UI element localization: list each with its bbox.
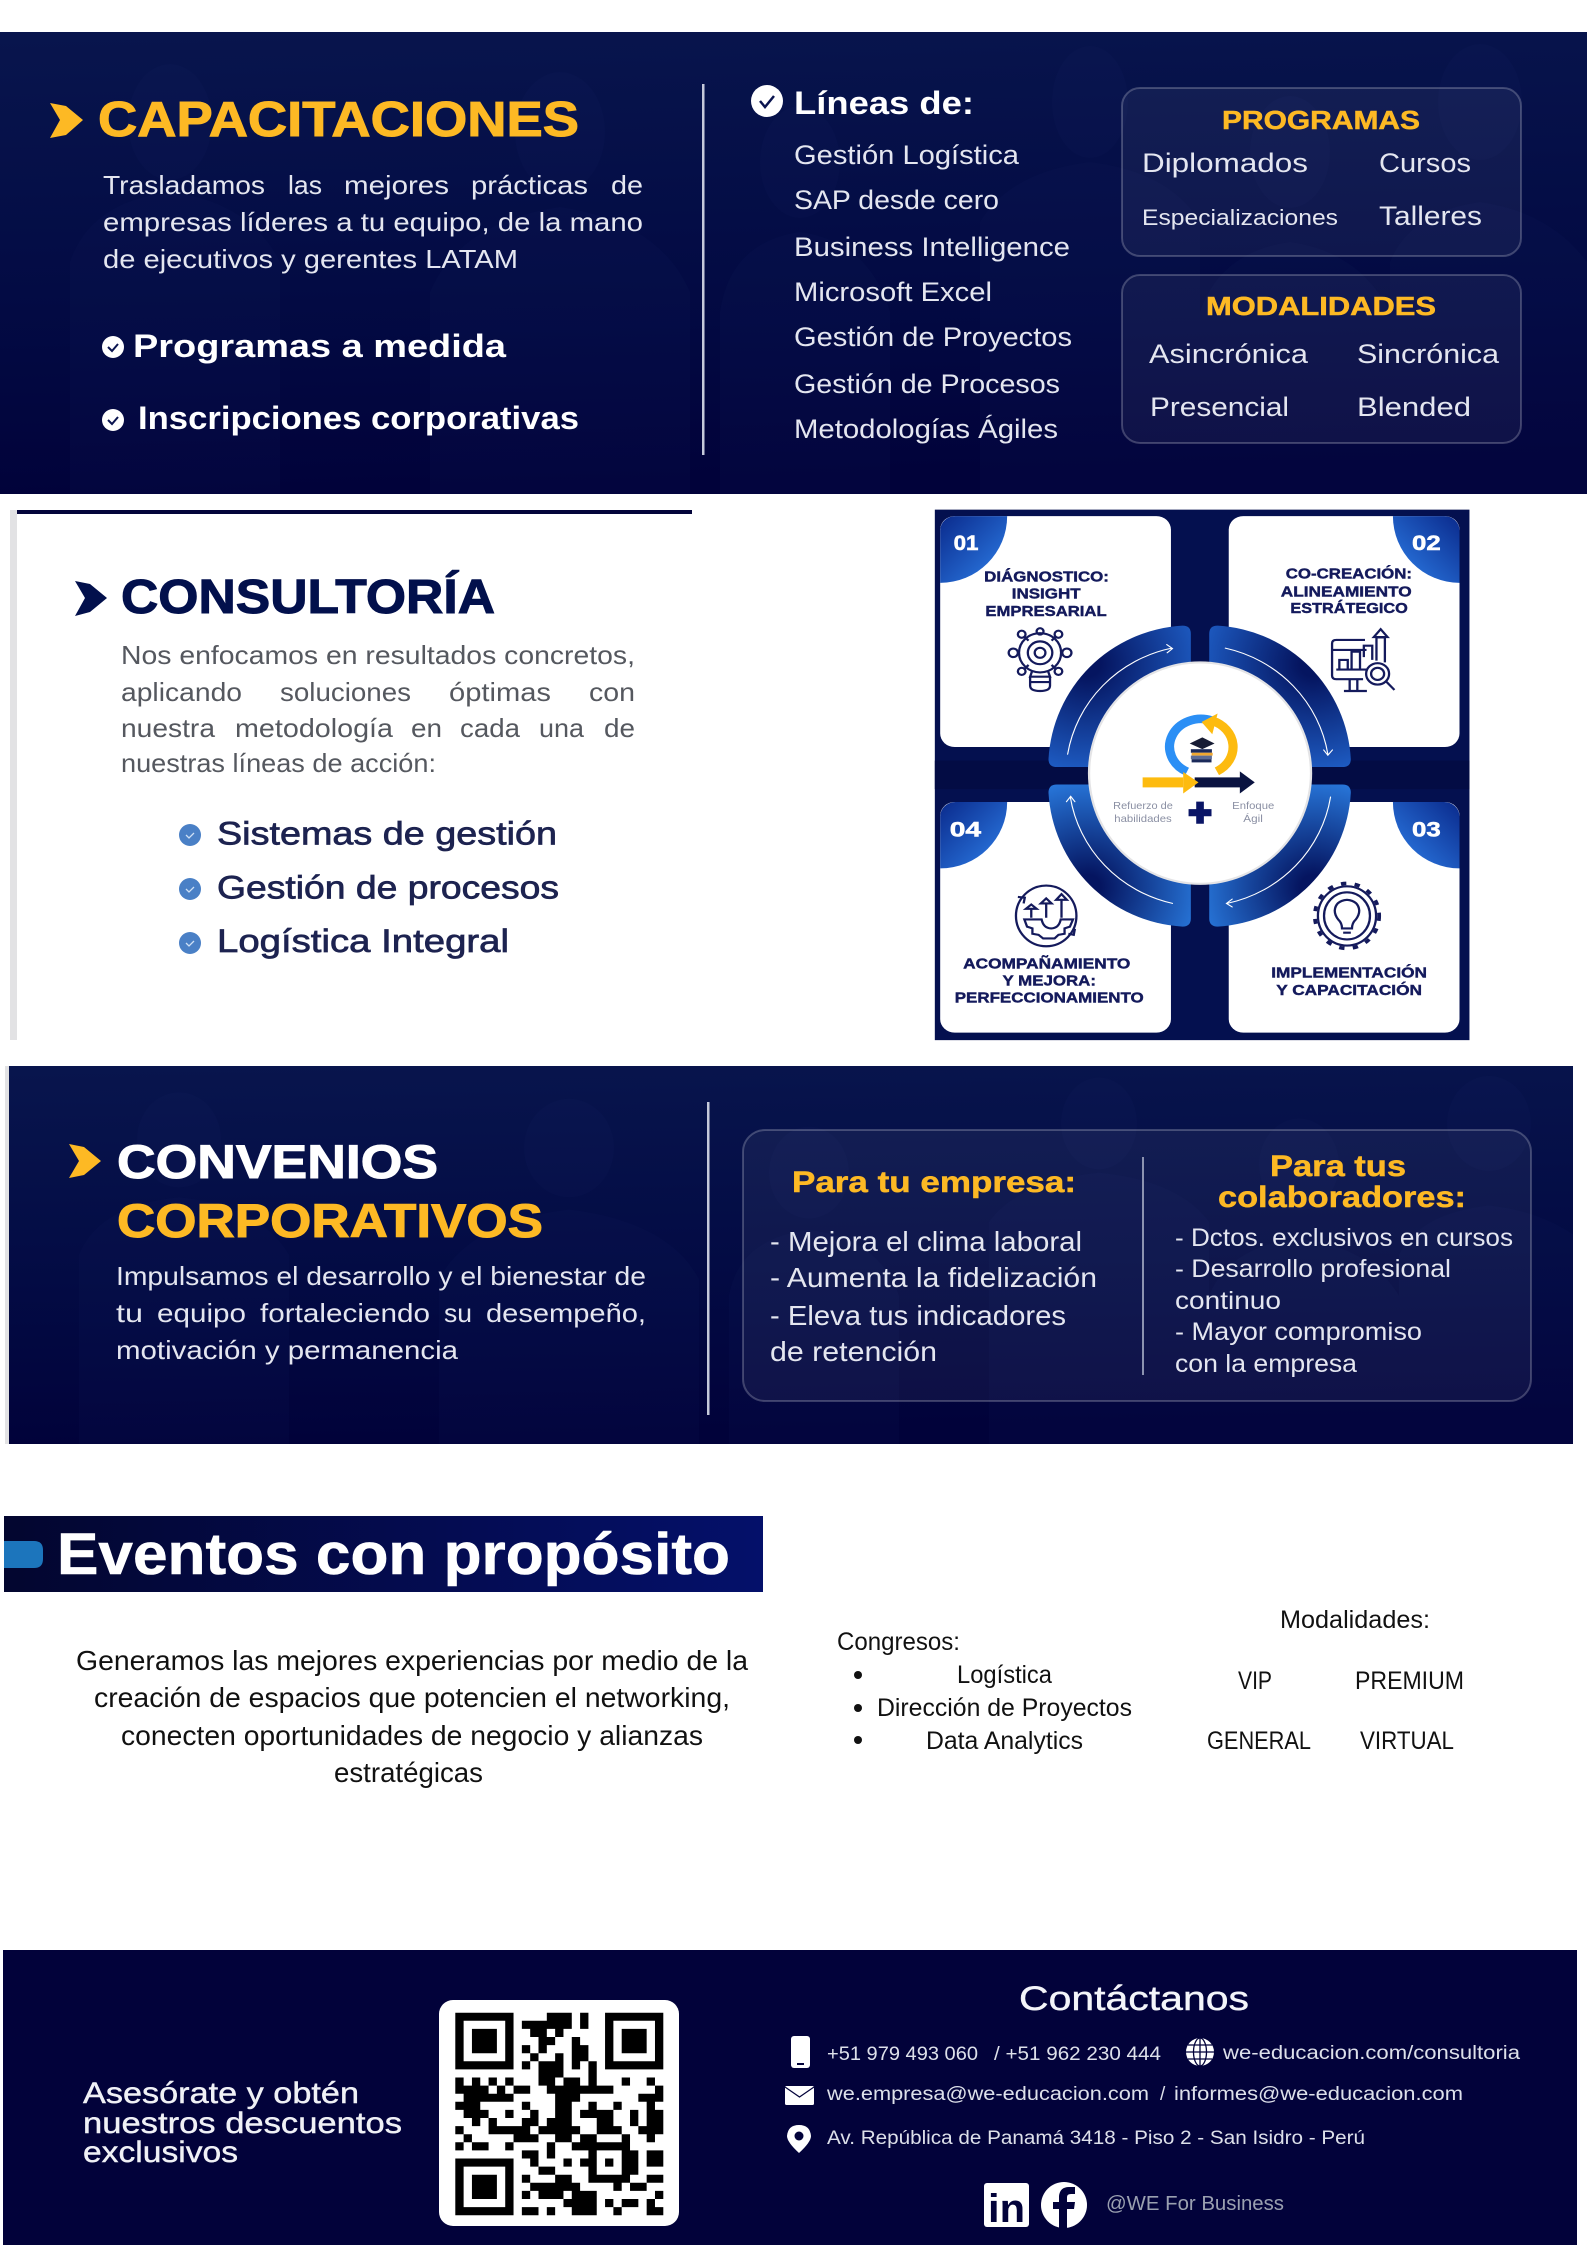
- heading: convenios corporativos: CORPORATIVOS: [117, 1194, 543, 1247]
- contact: emails: [785, 2084, 1463, 2105]
- column: para tus colaboradores: continuo: [1175, 1287, 1281, 1315]
- card 04: ACOMPAÑAMIENTO: [963, 955, 1130, 972]
- list: modalidades de eventos: GENERAL: [1207, 1727, 1311, 1755]
- list: modalidades de eventos: [1207, 1606, 1464, 1755]
- panel: consultoria: [10, 510, 692, 1040]
- list: lineas de: Gestión de Procesos: [794, 369, 1060, 399]
- icon: gear with lightbulb: [1315, 883, 1379, 948]
- contact: phones: +51 979 493 060: [827, 2044, 978, 2065]
- column: para tus colaboradores: Para tus: [1270, 1150, 1406, 1183]
- card 04: Y MEJORA:: [1003, 973, 1096, 989]
- text block: description: [121, 640, 635, 778]
- heading: capacitaciones: CAPACITACIONES: [98, 93, 579, 147]
- icon: yellow chevron: [50, 103, 83, 138]
- text block: description: cada: [460, 713, 521, 743]
- text block: description: de: [604, 713, 635, 743]
- text block: call to action: Asesórate y obtén: [83, 2077, 359, 2110]
- list: action lines: Logística Integral: [217, 923, 509, 959]
- text block: description: tu: [116, 1298, 143, 1328]
- text block: description: empresas líderes a tu equipo, de la mano: [103, 207, 643, 237]
- panel: modalidades: Presencial: [1150, 392, 1289, 422]
- text block: description: las: [288, 170, 322, 200]
- panel: programas: Cursos: [1379, 148, 1471, 178]
- heading band: eventos con proposito: Eventos con propósito: [57, 1522, 730, 1587]
- column: para tus colaboradores: [1175, 1150, 1513, 1378]
- panel: modalidades: Blended: [1357, 392, 1471, 422]
- text block: eventos description: estratégicas: [334, 1757, 483, 1788]
- text block: description: con: [589, 677, 635, 707]
- list: action lines: Gestión de procesos: [217, 870, 559, 906]
- panel: programas: Talleres: [1379, 201, 1482, 231]
- text block: description: metodología: [235, 713, 394, 743]
- text block: description: mejores: [344, 170, 449, 200]
- list: lineas de: Microsoft Excel: [794, 277, 992, 307]
- column: para tu empresa: Para tu empresa:: [792, 1166, 1076, 1199]
- text block: description: fortaleciendo: [260, 1298, 430, 1328]
- panel: capacitaciones: [0, 32, 1587, 494]
- text block: description: soluciones: [280, 677, 411, 707]
- column: para tus colaboradores: - Mayor compromiso: [1175, 1318, 1422, 1346]
- list: lineas de: Metodologías Ágiles: [794, 414, 1058, 444]
- heading: contactanos: Contáctanos: [1019, 1980, 1249, 2018]
- text block: description: Nos enfocamos en resultados concretos,: [121, 640, 635, 670]
- list: modalidades de eventos: PREMIUM: [1355, 1667, 1464, 1695]
- text block: description: su: [444, 1298, 472, 1328]
- text block: description: una: [539, 713, 585, 743]
- text block: description: en: [411, 713, 442, 743]
- list: congresos: [837, 1628, 1132, 1755]
- text block: call to action: exclusivos: [83, 2136, 238, 2169]
- card 02: ESTRÁTEGICO: [1290, 601, 1408, 617]
- column: para tus colaboradores: colaboradores:: [1218, 1181, 1466, 1214]
- column: para tus colaboradores: con la empresa: [1175, 1350, 1357, 1378]
- center circle: agile skills logo: Ágil: [1243, 812, 1263, 825]
- column: para tu empresa: - Aumenta la fidelización: [770, 1262, 1097, 1293]
- card 02: CO-CREACIÓN:: [1286, 565, 1412, 582]
- card 02: [1229, 516, 1460, 747]
- card 01: 01: [954, 531, 978, 555]
- list: lineas de: Líneas de:: [794, 85, 974, 121]
- heading: convenios corporativos: [117, 1135, 543, 1247]
- item: programas a medida: Programas a medida: [133, 328, 506, 364]
- icons: linkedin and facebook: [984, 2182, 1087, 2231]
- panel: modalidades: [1122, 275, 1521, 443]
- text block: description: desempeño,: [486, 1298, 646, 1328]
- card 02: 02: [1412, 531, 1441, 555]
- text block: description: motivación y permanencia: [116, 1335, 459, 1365]
- panel: footer: [3, 1950, 1577, 2245]
- heading: consultoria: CONSULTORÍA: [121, 570, 495, 624]
- text block: eventos description: creación de espacios que potencien el networking,: [94, 1682, 730, 1713]
- center circle: agile skills logo: [1088, 661, 1312, 885]
- list: action lines: [179, 816, 559, 959]
- text block: call to action: [83, 2077, 402, 2169]
- qr code: [439, 2000, 679, 2226]
- text block: description: óptimas: [449, 677, 551, 707]
- icon: navy chevron: [75, 581, 107, 616]
- panel: convenios corporativos: [5, 1066, 1587, 1445]
- contact: emails: we.empresa@we-educacion.com: [826, 2084, 1149, 2105]
- list: congresos: Data Analytics: [926, 1727, 1083, 1755]
- text block: description: aplicando: [121, 677, 242, 707]
- text block: eventos description: [76, 1645, 748, 1788]
- ring: four arc segments: [1048, 626, 1351, 927]
- contact: emails: informes@we-educacion.com: [1174, 2084, 1463, 2105]
- text block: description: Impulsamos el desarrollo y el bienestar de: [116, 1261, 646, 1291]
- card 01: EMPRESARIAL: [985, 603, 1107, 620]
- icon: bulb with nodes: [1009, 628, 1071, 691]
- panel: modalidades: Asincrónica: [1149, 339, 1309, 369]
- contact: website: [1186, 2038, 1520, 2066]
- list: action lines: Sistemas de gestión: [217, 816, 557, 852]
- column: para tus colaboradores: - Desarrollo profesional: [1175, 1255, 1451, 1283]
- center circle: agile skills logo: Refuerzo de: [1113, 801, 1173, 812]
- panel: programas: Especializaciones: [1142, 205, 1338, 230]
- contact: phones: [791, 2036, 1161, 2068]
- icon: gear with rising arrows: [1016, 886, 1076, 946]
- text block: call to action: nuestros descuentos: [83, 2107, 402, 2140]
- list: congresos: Dirección de Proyectos: [877, 1694, 1132, 1722]
- card 04: 04: [950, 817, 982, 841]
- icon: yellow chevron: [69, 1144, 101, 1178]
- list: modalidades de eventos: Modalidades:: [1280, 1606, 1430, 1634]
- list: congresos: Congresos:: [837, 1628, 960, 1656]
- text block: description: [116, 1261, 646, 1365]
- list: lineas de: SAP desde cero: [794, 185, 999, 215]
- card 01: DIÁGNOSTICO:: [984, 569, 1109, 585]
- card 03: [1229, 802, 1460, 1033]
- text block: description: [103, 170, 643, 274]
- panel: programas: Diplomados: [1142, 148, 1308, 178]
- card 01: [940, 516, 1171, 747]
- list: lineas de: [751, 85, 1072, 444]
- contact: address: Av. República de Panamá 3418 - Piso 2 - San Isidro - Perú: [827, 2128, 1365, 2149]
- text block: eventos description: Generamos las mejores experiencias por medio de la: [76, 1645, 748, 1676]
- card 03: 03: [1412, 817, 1441, 841]
- icons: linkedin and facebook: in: [988, 2187, 1025, 2231]
- contact: phones: / +51 962 230 444: [994, 2044, 1161, 2065]
- text: social handle: @WE For Business: [1106, 2193, 1284, 2215]
- card 03: Y CAPACITACIÓN: [1276, 981, 1422, 999]
- text block: description: nuestra: [121, 713, 216, 743]
- column: para tus colaboradores: - Dctos. exclusivos en cursos: [1175, 1224, 1513, 1252]
- panel: modalidades: Sincrónica: [1357, 339, 1500, 369]
- text block: eventos description: conecten oportunidades de negocio y alianzas: [121, 1720, 703, 1751]
- list: congresos: Logística: [957, 1661, 1052, 1689]
- center circle: agile skills logo: habilidades: [1114, 814, 1172, 825]
- list: modalidades de eventos: VIRTUAL: [1360, 1727, 1454, 1755]
- card 01: INSIGHT: [1012, 586, 1081, 602]
- text block: description: Trasladamos: [103, 170, 265, 200]
- text block: description: de ejecutivos y gerentes LATAM: [103, 244, 518, 274]
- heading: convenios corporativos: CONVENIOS: [117, 1135, 438, 1188]
- list: lineas de: Business Intelligence: [794, 232, 1070, 262]
- card 04: [940, 802, 1171, 1033]
- list: modalidades de eventos: VIP: [1238, 1667, 1272, 1695]
- column: para tu empresa: de retención: [770, 1336, 937, 1367]
- panel: modalidades: MODALIDADES: [1206, 291, 1436, 321]
- card 03: IMPLEMENTACIÓN: [1271, 964, 1427, 982]
- column: para tu empresa: - Mejora el clima laboral: [770, 1226, 1082, 1257]
- panel: programas: PROGRAMAS: [1222, 105, 1420, 135]
- list: lineas de: Gestión Logística: [794, 140, 1020, 170]
- item: inscripciones corporativas: Inscripciones corporativas: [138, 400, 579, 436]
- column: para tu empresa: [770, 1166, 1097, 1367]
- contact: emails: /: [1160, 2084, 1166, 2105]
- contact: website: we-educacion.com/consultoria: [1222, 2043, 1520, 2064]
- text block: description: nuestras líneas de acción:: [121, 748, 436, 778]
- center circle: agile skills logo: Enfoque: [1232, 801, 1275, 812]
- diagram: four step cycle: [935, 510, 1469, 1040]
- icon: monitor with chart and magnifier: [1332, 629, 1394, 691]
- panel: programas: [1122, 88, 1521, 256]
- column: para tu empresa: - Eleva tus indicadores: [770, 1300, 1066, 1331]
- text block: description: prácticas: [471, 170, 588, 200]
- card 04: PERFECCIONAMIENTO: [955, 990, 1144, 1006]
- panel: benefits box: [743, 1130, 1531, 1401]
- list: lineas de: Gestión de Proyectos: [794, 322, 1072, 352]
- contact: address: [787, 2125, 1365, 2153]
- text block: description: de: [611, 170, 643, 200]
- text block: description: equipo: [157, 1298, 246, 1328]
- card 02: ALINEAMIENTO: [1281, 584, 1412, 600]
